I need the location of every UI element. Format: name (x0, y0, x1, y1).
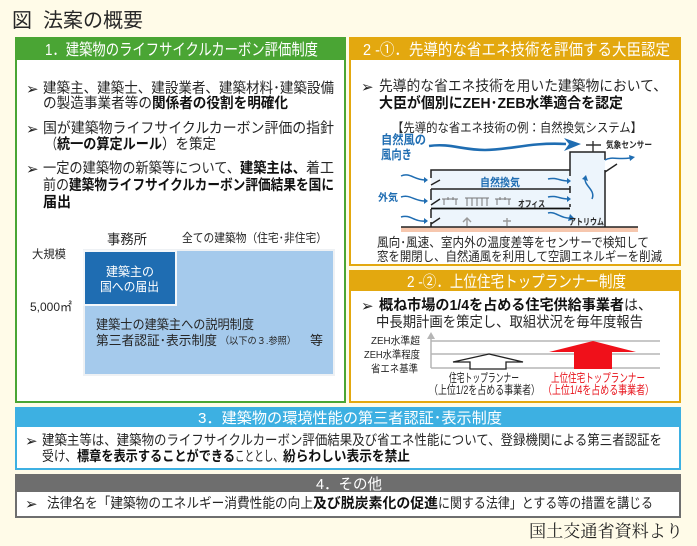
building outline (401, 152, 638, 227)
bullet: stakeholders (26, 79, 334, 112)
panel 4 text: に関する法律」とする等の措置を講じる (438, 495, 653, 511)
panel 3 text (25, 432, 662, 464)
axis labels (364, 334, 420, 375)
bullet: certification: 大臣が個別にZEH･ZEB水準適合を認定 (379, 94, 623, 112)
panel 3 text: ➢ (25, 432, 38, 450)
diagram label: wind direction (381, 132, 426, 162)
office desks (442, 197, 511, 206)
panel 1 heading: 1．建築物のライフサイクルカーボン評価制度 (45, 41, 318, 59)
bullet: national guideline: 統一の算定ルール (57, 135, 162, 153)
arrow: top runner (453, 354, 523, 369)
bullet: notification duty: 着工 (306, 160, 334, 177)
dark box text (100, 264, 159, 294)
panel: 2-2 top runner (349, 270, 681, 402)
panel: 1 life-cycle carbon evaluation (15, 37, 346, 402)
axis labels: ZEH水準超 (371, 334, 420, 347)
bullet: notification duty: 一定の建築物の新築等について、 (43, 159, 240, 177)
bullet: top runner: 中長期計画を策定し、取組状況を毎年度報告 (376, 314, 643, 331)
source credit: 国土交通省資料より (529, 522, 683, 541)
bullet: national guideline: （ (46, 136, 57, 153)
axis labels: ZEH水準程度 (364, 348, 420, 361)
axis labels: 省エネ基準 (371, 362, 418, 375)
ground band (401, 227, 638, 232)
panel 4 text: 及び脱炭素化の促進 (313, 495, 438, 511)
bullet: top runner: 概ね市場の1/4を占める住宅供給事業者 (379, 296, 624, 314)
diagram label: wind direction: 自然風の (381, 132, 426, 147)
bullet: notification duty (26, 159, 334, 211)
light area text: 建築士の建築主への説明制度 (96, 317, 254, 332)
panel 2-2 header bar (349, 270, 681, 291)
title: 図 (12, 10, 32, 32)
row label: large scale: 大規模 (32, 247, 66, 261)
bullet: top runner (361, 296, 652, 331)
diagram explanation: 窓を開閉し、自然通風を利用して空調エネルギーを削減 (377, 249, 662, 264)
bullet: notification duty: 建築物ライフサイクルカーボン評価結果を国に (69, 176, 334, 194)
panel: 2-1 minister certification (349, 37, 681, 265)
window openings (431, 164, 617, 224)
dark blue box: notification (84, 251, 176, 305)
diagram label: outside air: 外気 (378, 191, 398, 204)
light blue area: all buildings (84, 250, 334, 375)
caption: top runner: 住宅トップランナー (449, 371, 519, 385)
panel: 3 third-party certification (15, 407, 681, 469)
axis arrowhead (427, 332, 435, 339)
diagram label: natural ventilation: 自然換気 (480, 175, 520, 189)
bullet: certification: 先導的な省エネ技術を用いた建築物において、 (379, 77, 667, 95)
bullet: certification: ➢ (361, 78, 374, 96)
bullet: stakeholders: 関係者の役割を明確化 (152, 94, 288, 112)
diagram explanation: 風向･風速、室内外の温度差等をセンサーで検知して (377, 235, 649, 250)
example caption: 【先導的な省エネ技術の例：自然換気システム】 (392, 120, 642, 135)
dark box text: 国への届出 (100, 280, 159, 294)
building fill (431, 152, 605, 227)
bullet: stakeholders: ➢ (26, 80, 39, 98)
natural ventilation diagram (378, 132, 652, 232)
bullet: national guideline: ➢ (26, 120, 39, 138)
top runner chart (364, 332, 660, 397)
bullet: top runner: ➢ (361, 297, 374, 315)
bullet: stakeholders: の製造事業者等の (43, 94, 152, 112)
panel 4 text: ➢ (25, 495, 38, 513)
caption: top runner (429, 371, 540, 397)
caption: upper top runner (543, 371, 654, 397)
arrow: upper top runner (549, 341, 636, 369)
diagram label: atrium: アトリウム (569, 217, 604, 227)
main wind arrow (429, 144, 566, 150)
panel 2-1 heading: 2 -①．先導的な省エネ技術を評価する大臣認定 (363, 40, 670, 59)
panel 3 text: 紛らわしい表示を禁止 (283, 448, 410, 464)
panel 4 text (25, 495, 653, 513)
caption: upper top runner: 上位住宅トップランナー (551, 371, 645, 385)
panel 3 text: こととし、 (235, 448, 283, 464)
column label: office: 事務所 (107, 232, 147, 247)
bullet: national guideline (26, 119, 334, 153)
scope chart (30, 230, 334, 375)
bullet: top runner: は、 (624, 298, 652, 314)
bullet: stakeholders: 建築主、建築士、建設業者、建築材料･建築設備 (43, 79, 334, 97)
bullet: notification duty: ➢ (26, 160, 39, 178)
caption: top runner: （上位1/2を占める事業者） (429, 382, 540, 397)
diagram label: office: オフィス (518, 199, 545, 209)
bullet: notification duty: 建築主は、 (240, 159, 306, 177)
panel: 4 other (15, 474, 681, 517)
light area text (96, 317, 323, 348)
chart gridlines (431, 338, 660, 368)
title: 法案の概要 (43, 9, 143, 32)
panel 2-1 header bar (349, 37, 681, 60)
main wind arrowhead (564, 138, 581, 151)
panel 4 heading: 4．その他 (316, 476, 382, 493)
caption: upper top runner: （上位1/4を占める事業者） (543, 382, 654, 397)
light area text: 第三者認証･表示制度 (96, 333, 217, 348)
weather sensor icon (586, 141, 601, 152)
panel 4 text: 法律名を「建築物のエネルギー消費性能の向上 (47, 495, 313, 511)
column label: all buildings: 全ての建築物（住宅･非住宅） (182, 230, 327, 245)
small arrowheads (424, 155, 635, 224)
bullet: notification duty: 前の (43, 177, 69, 194)
small airflow arrows (401, 158, 630, 221)
panel 2-2 heading: 2 -②．上位住宅トップランナー制度 (407, 273, 626, 291)
bullet: notification duty: 届出 (43, 194, 71, 211)
bullet: national guideline: ）を策定 (162, 136, 216, 153)
panel 1 header bar (15, 37, 346, 60)
panel 3 heading: 3．建築物の環境性能の第三者認証･表示制度 (198, 409, 502, 427)
bullet: national guideline: 国が建築物ライフサイクルカーボン評価の指針 (43, 119, 334, 137)
diagram label: wind direction: 風向き (381, 147, 412, 162)
panel 3 text: 標章を表示することができる (77, 448, 235, 464)
diagram label: weather sensor: 気象センサー (606, 139, 652, 150)
dark box text: 建築主の (106, 264, 154, 279)
light area text: 等 (310, 333, 323, 348)
diagram explanation (377, 235, 662, 264)
panel 3 header bar (15, 407, 681, 427)
panel 3 text: 受け、 (42, 448, 77, 464)
row label: 5000 m2: 5,000㎡ (30, 300, 72, 314)
bullet: certification (361, 77, 667, 112)
office floor line (431, 208, 570, 210)
light area text: （以下の３.参照） (220, 335, 296, 347)
panel 4 header bar (15, 474, 681, 492)
people icons (463, 218, 511, 226)
